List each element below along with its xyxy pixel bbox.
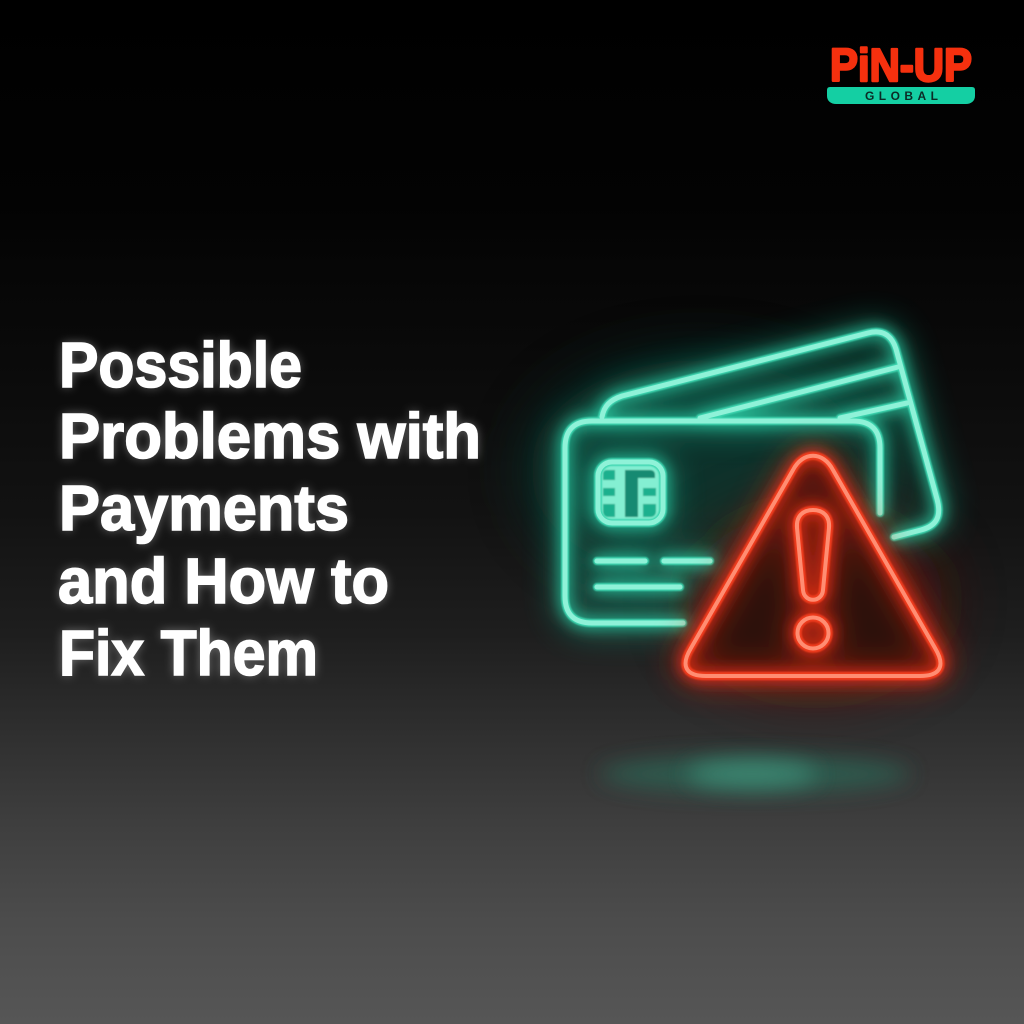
title: and How to xyxy=(58,545,389,617)
floor reflection glow xyxy=(600,756,910,792)
title: Possible xyxy=(59,329,302,401)
title: and How to xyxy=(58,545,389,617)
title: Fix Them xyxy=(59,617,318,689)
title: Problems with xyxy=(59,400,481,472)
chip fill and contacts xyxy=(598,462,663,523)
title: Problems with xyxy=(59,400,481,472)
logo: Pin-Up Global xyxy=(827,39,975,104)
icon: neon warning triangle xyxy=(686,456,940,676)
icon: neon credit cards xyxy=(565,332,939,623)
title: Possible xyxy=(59,329,302,401)
logo subtitle: GLOBAL xyxy=(865,89,938,103)
title: Fix Them xyxy=(59,617,318,689)
logo teal bar xyxy=(827,87,975,104)
title: Payments xyxy=(59,472,349,544)
logo wordmark: PiN-UP xyxy=(830,39,972,91)
backdrop glows behind icon xyxy=(530,360,945,690)
title: Payments xyxy=(59,472,349,544)
title xyxy=(58,329,481,689)
